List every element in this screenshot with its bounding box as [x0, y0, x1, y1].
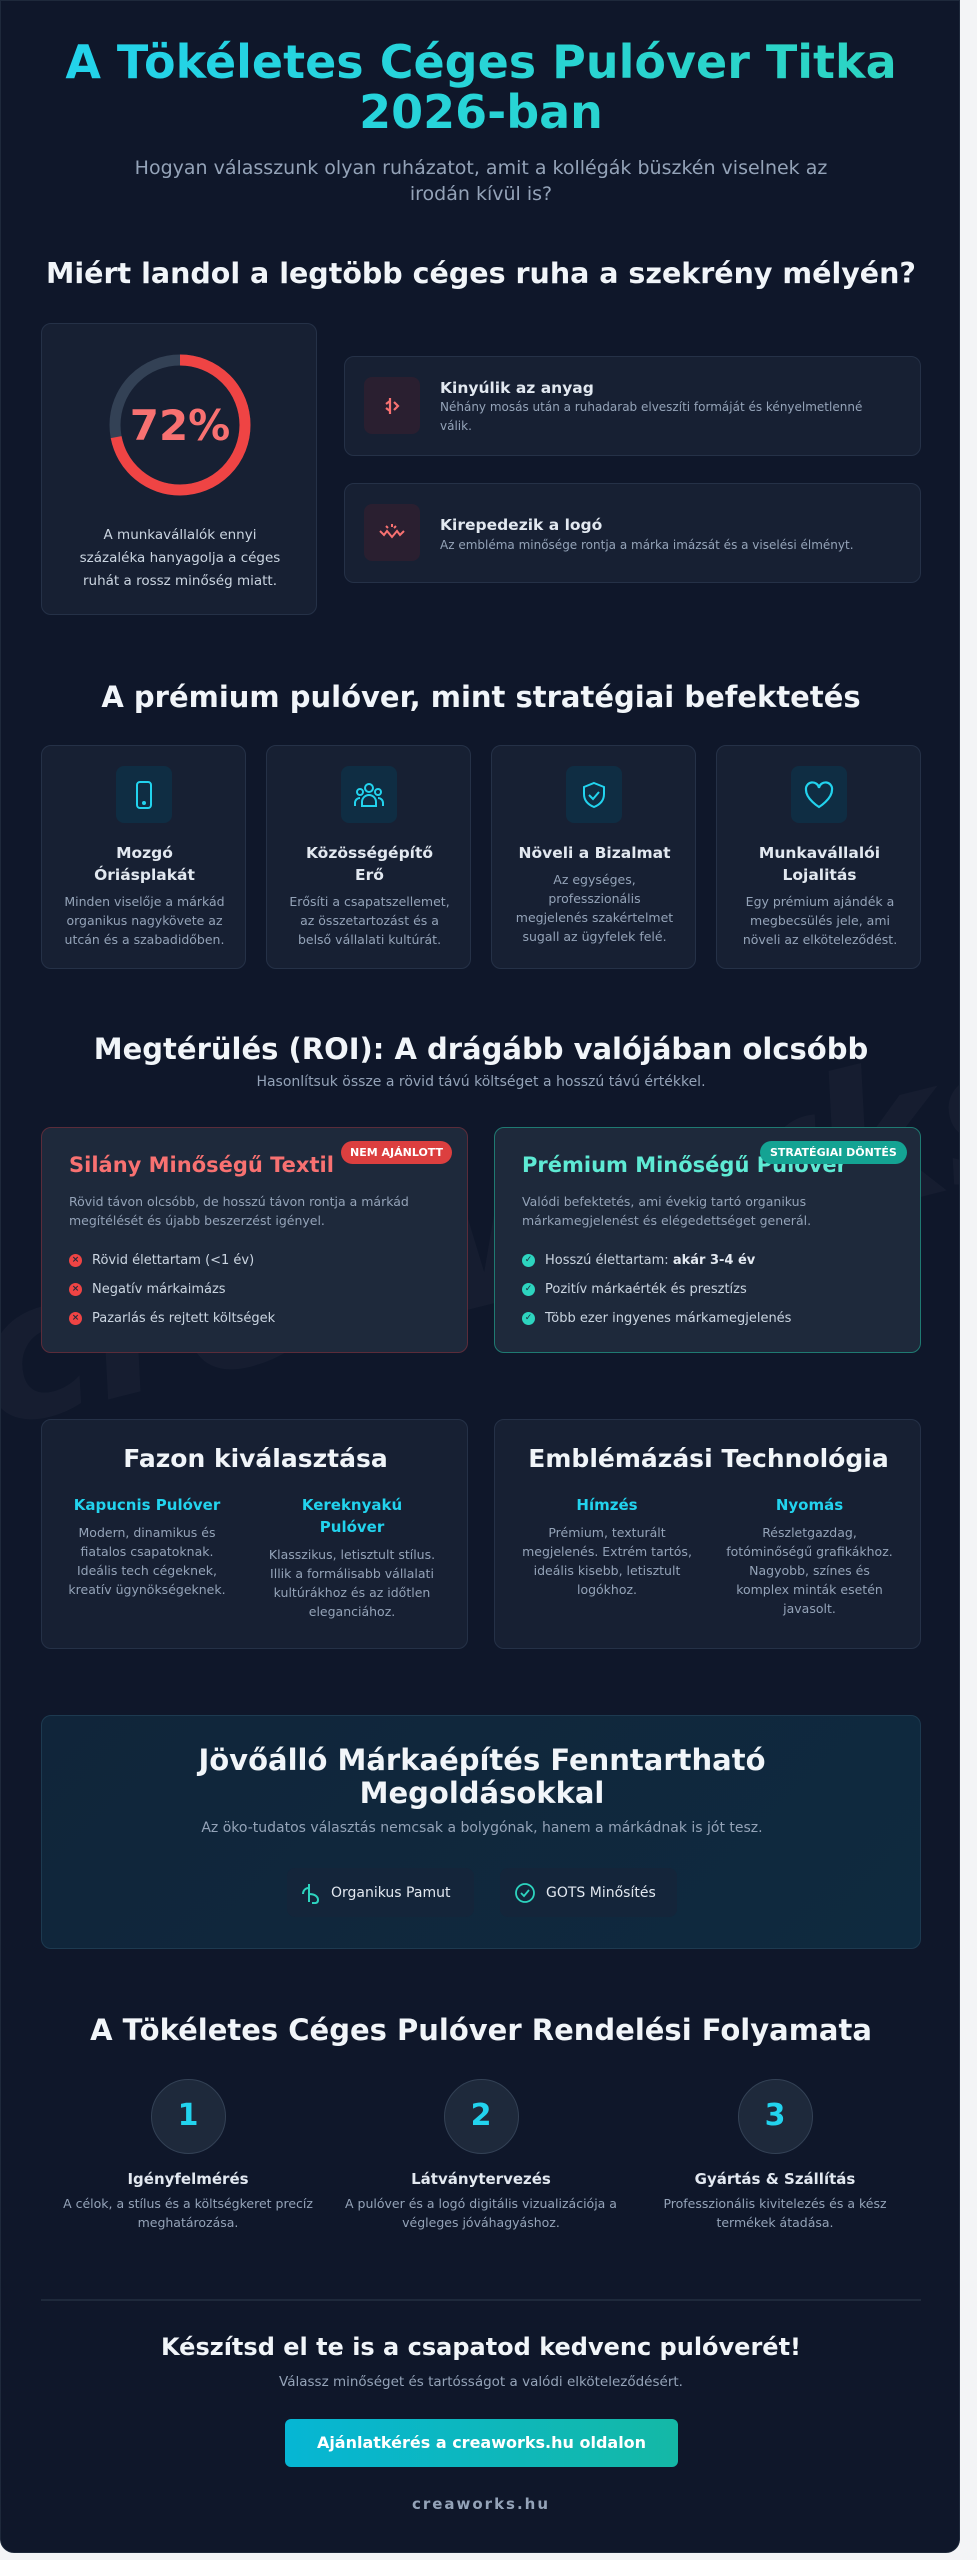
list: negatives: ×: [72, 1313, 79, 1323]
step 3: 3: [765, 2098, 785, 2133]
icon: heart: [791, 766, 847, 823]
stat text: A munkavállalók ennyi százaléka hanyagolja a céges ruhát a rossz minőség miatt.: [80, 527, 280, 589]
badge: strategic: STRATÉGIAI DÖNTÉS: [770, 1146, 897, 1159]
CTA heading: Készítsd el te is a csapatod kedvenc pulóverét!: [161, 2333, 801, 2361]
panel: style choice: Fazon kiválasztása: [123, 1444, 388, 1473]
panel: benefit 2: Erő: [355, 866, 384, 884]
panel: premium sweater: [494, 1127, 921, 1353]
donut chart: 72%: [130, 401, 230, 450]
list: positives: ✓: [525, 1284, 532, 1294]
list: positives: Hosszú élettartam: akár 3-4 év: [545, 1252, 755, 1268]
panel: benefit 1: Óriásplakát: [94, 866, 195, 884]
step 3: [663, 2079, 887, 2230]
step 3: Professzionális kivitelezés és a kész termékek átadása.: [663, 2196, 887, 2230]
panel: sustainability: Az öko-tudatos választás nemcsak a bolygónak, hanem a márkádnak is jót tesz.: [201, 1820, 763, 1836]
icon: group: [341, 766, 397, 823]
panel: benefit 4: Lojalitás: [782, 866, 857, 884]
panel: benefit 3: Az egységes, professzionális megjelenés szakértelmet sugall az ügyfelek felé.: [516, 872, 673, 944]
panel: premium sweater: Prémium Minőségű Pulóver: [522, 1153, 847, 1177]
option: print: Nyomás: [776, 1496, 843, 1514]
panel: benefit 3: Növeli a Bizalmat: [518, 844, 671, 862]
heading: ROI: Megtérülés (ROI): A drágább valójában olcsóbb: [94, 1032, 868, 1066]
option: hoodie: Modern, dinamikus és fiatalos csapatoknak. Ideális tech cégeknek, kreatív ügynökségeknek.: [68, 1525, 226, 1597]
option: crew neck: Kereknyakú: [302, 1496, 402, 1514]
icon: stretch: [364, 377, 420, 434]
panel: sustainability: Megoldásokkal: [360, 1776, 604, 1810]
badge: strategic: [760, 1141, 907, 1164]
list: negatives: ×: [72, 1255, 79, 1265]
panel: benefit 4: [716, 745, 921, 969]
option: crew neck: Klasszikus, letisztult stílus. Illik a formálisabb vállalati kultúrákhoz és az időtlen eleganciához.: [269, 1547, 435, 1619]
icon: cracked: [364, 504, 420, 561]
panel: problem 1: [344, 356, 921, 456]
option: embroidery: Prémium, texturált megjelenés. Extrém tartós, ideális kisebb, letisztult logókhoz.: [522, 1525, 692, 1597]
step 2: [345, 2079, 617, 2230]
CTA subtitle: Válassz minőséget és tartósságot a valódi elköteleződésért.: [279, 2374, 683, 2390]
panel: benefit 2: Erősíti a csapatszellemet, az összetartozást és a belső vállalati kultúrát.: [289, 894, 450, 947]
panel: benefit 2: [266, 745, 471, 969]
list: negatives: [69, 1252, 275, 1326]
panel: cheap textile: Rövid távon olcsóbb, de hosszú távon rontja a márkád megítélését és újabb beszerzést igényel.: [69, 1194, 409, 1228]
panel: benefit 2: Közösségépítő: [306, 844, 433, 862]
step 1: 1: [178, 2098, 198, 2133]
step 3: Gyártás & Szállítás: [695, 2170, 855, 2188]
footer: creaworks.hu: [412, 2495, 550, 2513]
subtitle: Hogyan válasszunk olyan ruházatot, amit a kollégák büszkén viselnek az irodán kívül is?: [135, 157, 827, 205]
option: embroidery: Hímzés: [576, 1496, 638, 1514]
list: negatives: Negatív márkaimázs: [92, 1282, 226, 1296]
title: 2026-ban: [359, 85, 603, 139]
panel: problem 1: Néhány mosás után a ruhadarab elveszíti formáját és kényelmetlenné válik.: [440, 400, 862, 433]
panel: benefit 4: Egy prémium ajándék a megbecsülés jele, ami növeli az elköteleződést.: [743, 894, 897, 947]
panel: sustainability: Jövőálló Márkaépítés Fenntartható: [198, 1743, 766, 1777]
CTA button: [285, 2419, 678, 2467]
panel: cheap textile: Silány Minőségű Textil: [69, 1153, 334, 1177]
badge: not recommended: NEM AJÁNLOTT: [350, 1146, 443, 1159]
panel: benefit 1: Minden viselője a márkád organikus nagykövete az utcán és a szabadidőben.: [64, 894, 225, 947]
list: positives: ✓: [525, 1255, 532, 1265]
panel: branding tech: [494, 1419, 921, 1649]
panel: problem 2: Az embléma minősége rontja a márka imázsát és a viselési élményt.: [440, 538, 854, 552]
step 1: [63, 2079, 313, 2230]
step 2: A pulóver és a logó digitális vizualizációja a végleges jóváhagyáshoz.: [345, 2196, 617, 2230]
title: [1, 37, 961, 137]
step 2: 2: [471, 2098, 491, 2133]
step 2: Látványtervezés: [411, 2170, 551, 2188]
option: crew neck: Pulóver: [320, 1518, 384, 1536]
step 1: Igényfelmérés: [127, 2170, 249, 2188]
pill: organic cotton: [287, 1868, 474, 1917]
step 1: A célok, a stílus és a költségkeret precíz meghatározása.: [63, 2196, 313, 2230]
panel: problem 2: [344, 483, 921, 583]
heading: why: Miért landol a legtöbb céges ruha a szekrény mélyén?: [46, 257, 916, 290]
donut chart: [110, 354, 250, 496]
panel: problem 1: Kinyúlik az anyag: [440, 379, 594, 397]
option: print: Részletgazdag, fotóminőségű grafikákhoz. Nagyobb, színes és komplex minták esetén javasolt.: [726, 1525, 893, 1616]
panel: branding tech: Emblémázási Technológia: [528, 1444, 889, 1473]
panel: benefit 1: Mozgó: [116, 844, 173, 862]
panel: problem 2: Kirepedezik a logó: [440, 516, 602, 534]
option: hoodie: Kapucnis Pulóver: [74, 1496, 220, 1514]
pill: organic cotton: Organikus Pamut: [331, 1884, 450, 1900]
panel: sustainability: [41, 1715, 921, 1949]
panel: benefit 4: Munkavállalói: [759, 844, 880, 862]
list: negatives: ×: [72, 1284, 79, 1294]
pill: GOTS: GOTS Minősítés: [546, 1884, 656, 1900]
CTA button: Ajánlatkérés a creaworks.hu oldalon: [317, 2433, 646, 2452]
panel: cheap textile: [41, 1127, 468, 1353]
panel: benefit 3: [491, 745, 696, 969]
panel: benefit 1: [41, 745, 246, 969]
list: negatives: Pazarlás és rejtett költségek: [92, 1310, 275, 1326]
icon: phone: [116, 766, 172, 823]
list: negatives: Rövid élettartam (<1 év): [92, 1252, 254, 1268]
panel: style choice: [41, 1419, 468, 1649]
option: crew neck: [269, 1496, 435, 1619]
heading: process: A Tökéletes Céges Pulóver Rendelési Folyamata: [90, 2013, 872, 2047]
heading: premium: A prémium pulóver, mint stratégiai befektetés: [101, 680, 861, 714]
panel: stat 72%: [41, 323, 317, 615]
list: positives: [522, 1252, 791, 1326]
pill: GOTS: [500, 1868, 677, 1917]
badge: not recommended: [341, 1141, 452, 1164]
icon: shield: [566, 766, 622, 823]
list: positives: ✓: [525, 1313, 532, 1323]
title: A Tökéletes Céges Pulóver Titka: [65, 35, 897, 89]
ROI subtitle: Hasonlítsuk össze a rövid távú költséget a hosszú távú értékkel.: [256, 1074, 706, 1090]
panel: premium sweater: Valódi befektetés, ami évekig tartó organikus márkamegjelenést és elégedettséget generál.: [522, 1194, 811, 1228]
list: positives: Több ezer ingyenes márkamegjelenés: [545, 1310, 791, 1326]
list: positives: Pozitív márkaérték és presztízs: [545, 1282, 747, 1296]
